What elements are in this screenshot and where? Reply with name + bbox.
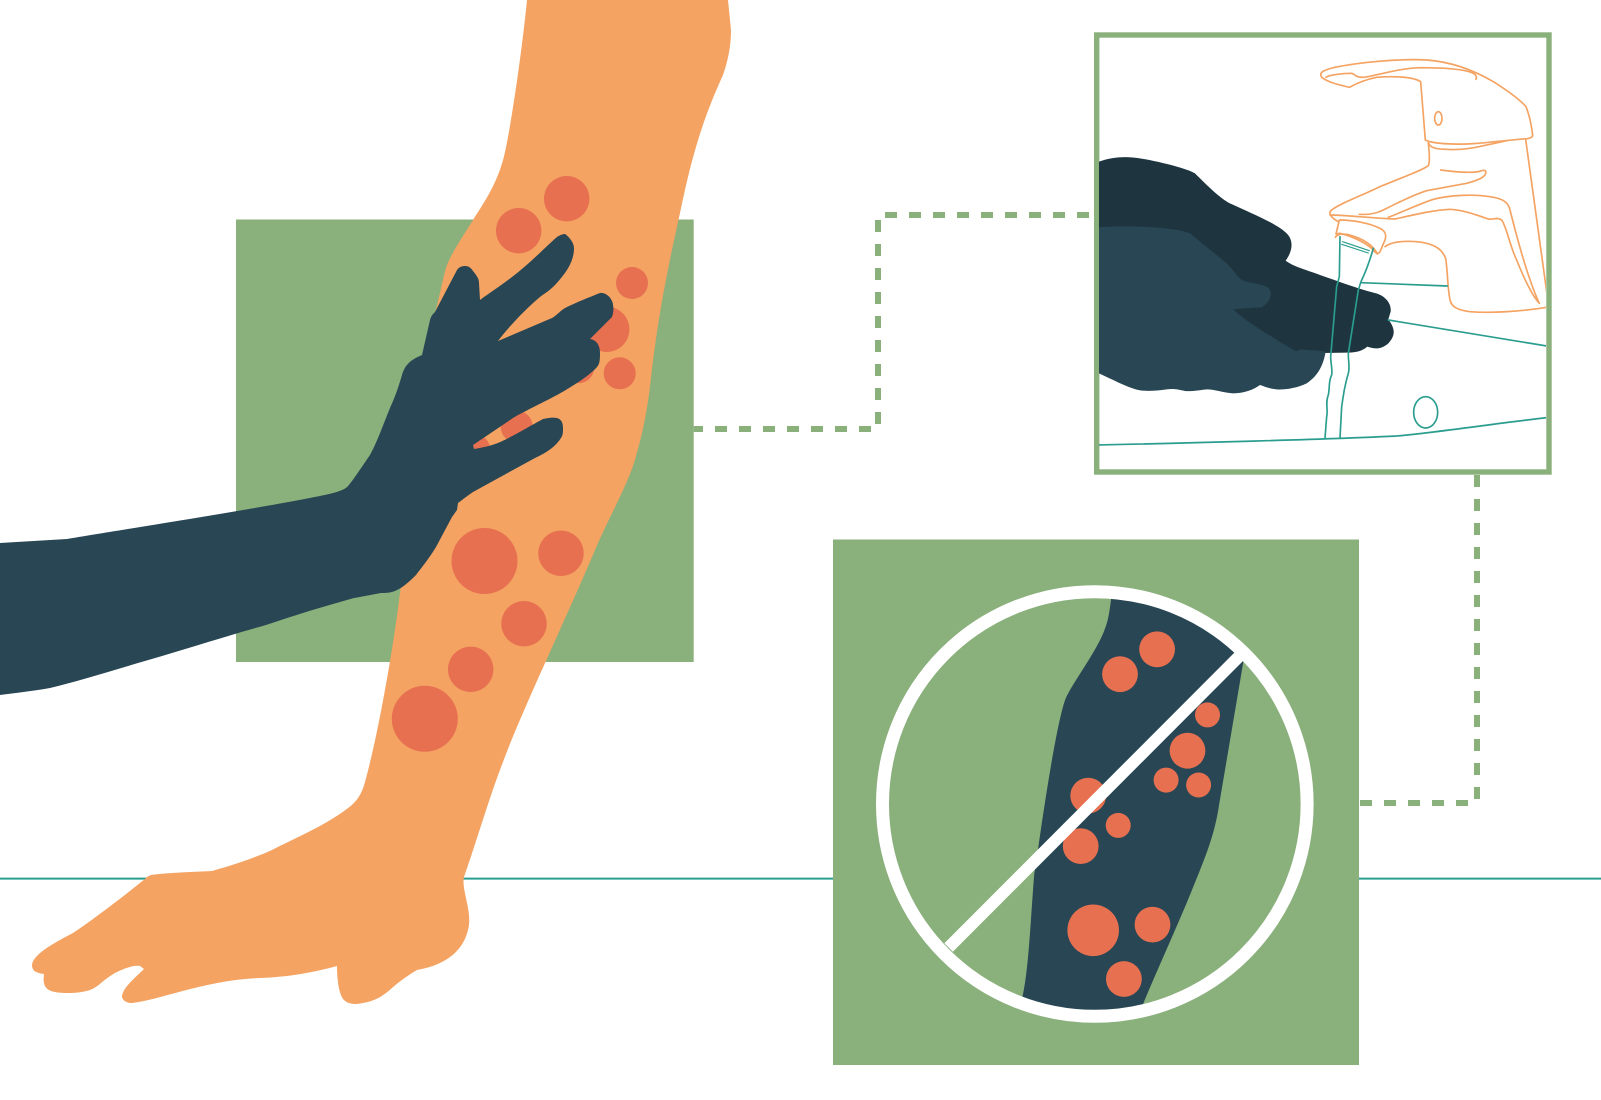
clipped dark leg with spots	[1022, 599, 1244, 1010]
green panel background	[833, 540, 1359, 1065]
rash spots on dark leg	[1063, 631, 1220, 997]
leg with rash	[32, 0, 731, 1004]
frame background	[1097, 35, 1549, 472]
prohibition sign	[883, 592, 1307, 1016]
dashed connector: wash frame to no-scratch panel	[1360, 475, 1477, 803]
green square behind leg	[236, 220, 694, 662]
handwashing frame	[1097, 35, 1549, 472]
sink scene	[1097, 60, 1547, 445]
front of hand under tap	[1097, 226, 1326, 393]
faucet outline	[1321, 60, 1547, 312]
sink and water lines	[1097, 237, 1547, 445]
dark leg silhouette	[1022, 599, 1244, 1010]
leg silhouette	[32, 0, 731, 1004]
no-scratch panel	[833, 540, 1359, 1065]
dashed connector: leg panel to wash frame	[694, 215, 1089, 429]
teal floor line	[0, 878, 1601, 880]
scratching arm and hand	[0, 234, 613, 695]
back of hand under tap	[1097, 157, 1394, 353]
rash spots on leg	[392, 176, 648, 752]
